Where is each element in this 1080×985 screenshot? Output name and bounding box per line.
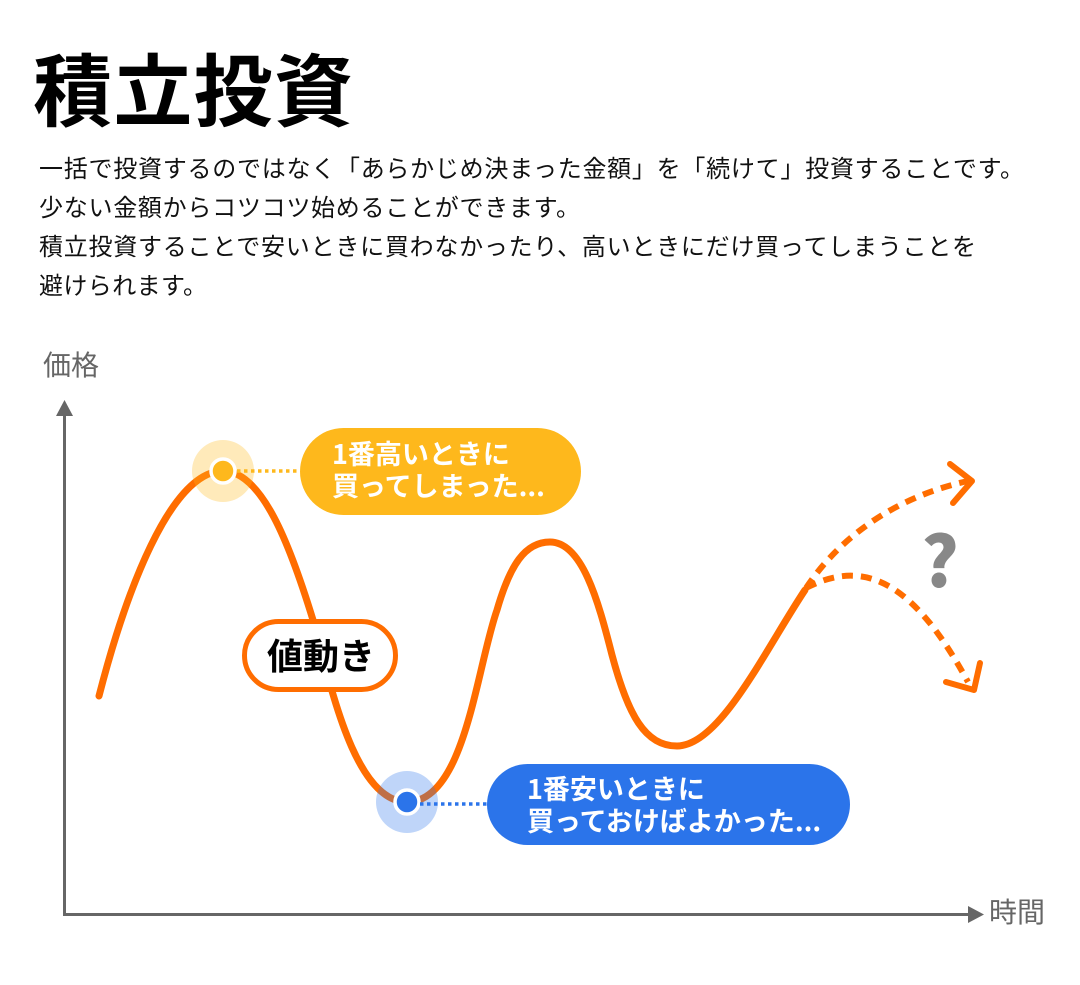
price line <box>99 471 805 802</box>
dashed forecast down arrow <box>806 576 980 690</box>
low point connector <box>420 802 487 806</box>
description text block: 避けられます。 <box>39 266 207 301</box>
title: 積立投資 <box>33 28 353 143</box>
question mark: ? <box>921 507 959 608</box>
description text block: 少ない金額からコツコツ始めることができます。 <box>39 188 580 223</box>
x axis label: 時間 <box>989 891 1045 931</box>
axes <box>56 400 984 923</box>
low point callout: 買っておけばよかった... <box>527 800 821 839</box>
high point callout <box>300 428 581 515</box>
price movement label <box>244 622 396 690</box>
low point marker <box>376 771 438 833</box>
high point marker <box>192 440 254 502</box>
description text block <box>39 149 1024 301</box>
description text block: 積立投資することで安いときに買わなかったり、高いときにだけ買ってしまうことを <box>39 227 976 262</box>
high point callout: 買ってしまった... <box>332 465 545 504</box>
description text block: 一括で投資するのではなく「あらかじめ決まった金額」を「続けて」投資することです。 <box>39 149 1024 184</box>
price movement label: 値動き <box>267 628 375 680</box>
high point connector <box>237 469 300 473</box>
y axis label: 価格 <box>43 344 99 384</box>
low point callout <box>487 764 850 845</box>
low point callout: 1番安いときに <box>527 768 705 807</box>
dashed forecast up arrow <box>806 464 972 588</box>
high point callout: 1番高いときに <box>332 433 510 472</box>
